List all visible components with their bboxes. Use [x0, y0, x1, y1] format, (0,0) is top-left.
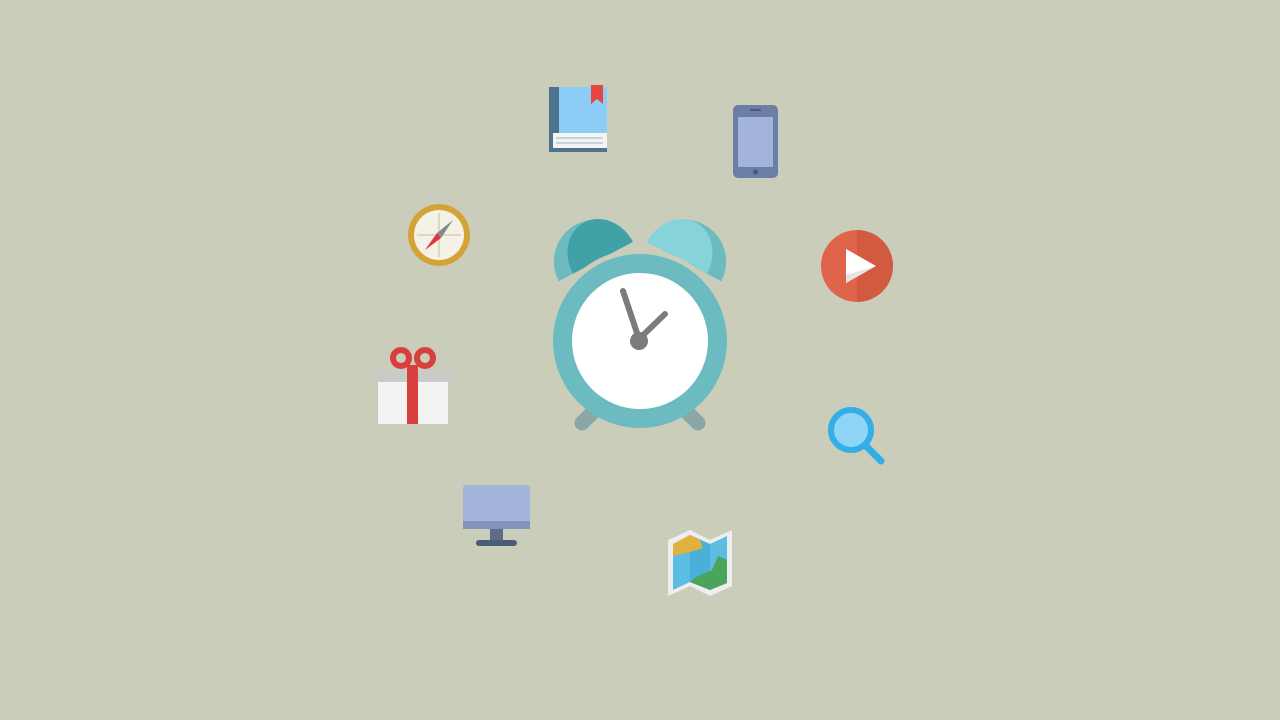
icon: gift — [374, 350, 452, 424]
icon: monitor — [463, 485, 530, 546]
icon: magnifier — [831, 410, 881, 461]
icon: alarm clock — [539, 205, 741, 433]
icon: compass — [408, 204, 470, 266]
icon: play button — [821, 230, 893, 302]
icon: map — [668, 530, 732, 596]
icon: book — [549, 85, 607, 152]
icon: phone — [733, 105, 778, 178]
